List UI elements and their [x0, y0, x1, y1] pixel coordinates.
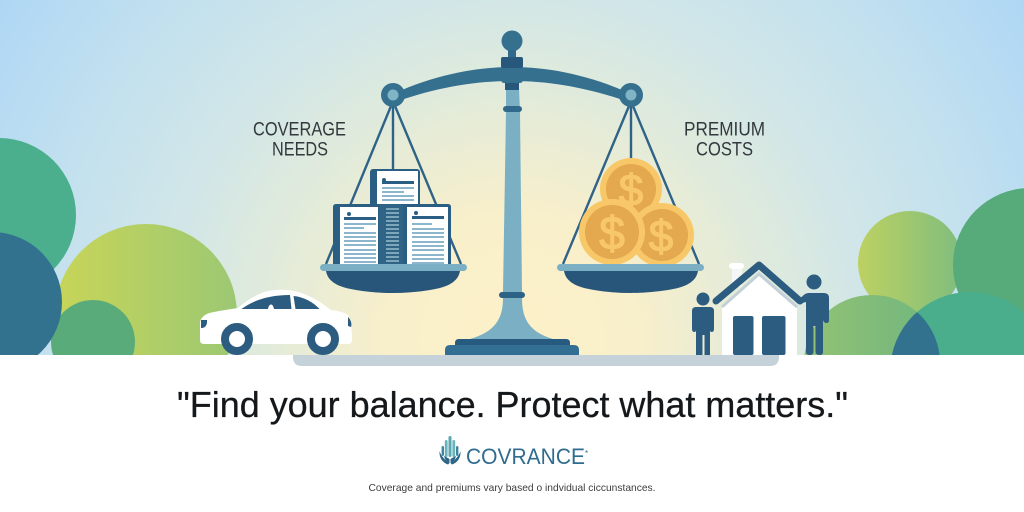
balance scale	[320, 30, 704, 355]
documents stack	[333, 169, 451, 264]
logo wordmark: COVRANCE	[466, 444, 585, 469]
sky background	[0, 0, 1024, 355]
ground bar	[293, 355, 779, 366]
spine	[379, 204, 407, 264]
icon: person left	[692, 292, 714, 355]
label: coverage needs: COVERAGE	[253, 120, 346, 140]
left trees	[0, 138, 237, 355]
icon: car	[200, 290, 352, 351]
icon: house	[716, 263, 800, 355]
right pivot	[619, 83, 643, 107]
icon: person right	[798, 274, 829, 355]
strings left	[326, 106, 461, 264]
top document	[370, 169, 420, 207]
disclaimer: Coverage and premiums vary based o indvidual ciccunstances.	[368, 482, 656, 494]
logo mark: *	[585, 449, 588, 458]
beam	[402, 67, 622, 99]
left pivot	[381, 83, 405, 107]
logo icon	[439, 436, 461, 464]
logo	[439, 436, 588, 469]
left document	[333, 204, 379, 264]
left coin: $	[599, 207, 625, 259]
label: premium costs: PREMIUM	[684, 120, 765, 140]
right pan	[557, 264, 704, 293]
tagline: "Find your balance. Protect what matters."	[177, 384, 848, 425]
coins	[579, 158, 694, 267]
left pan	[320, 264, 467, 293]
top coin: $	[619, 166, 643, 215]
scale column	[445, 81, 579, 355]
right coin: $	[649, 212, 673, 261]
right trees	[804, 188, 1024, 355]
right document	[403, 204, 451, 264]
strings right	[563, 106, 699, 264]
label: coverage needs second line: NEEDS	[272, 140, 328, 160]
label: premium costs second line: COSTS	[696, 140, 753, 160]
beam top collar and knob	[501, 30, 523, 83]
